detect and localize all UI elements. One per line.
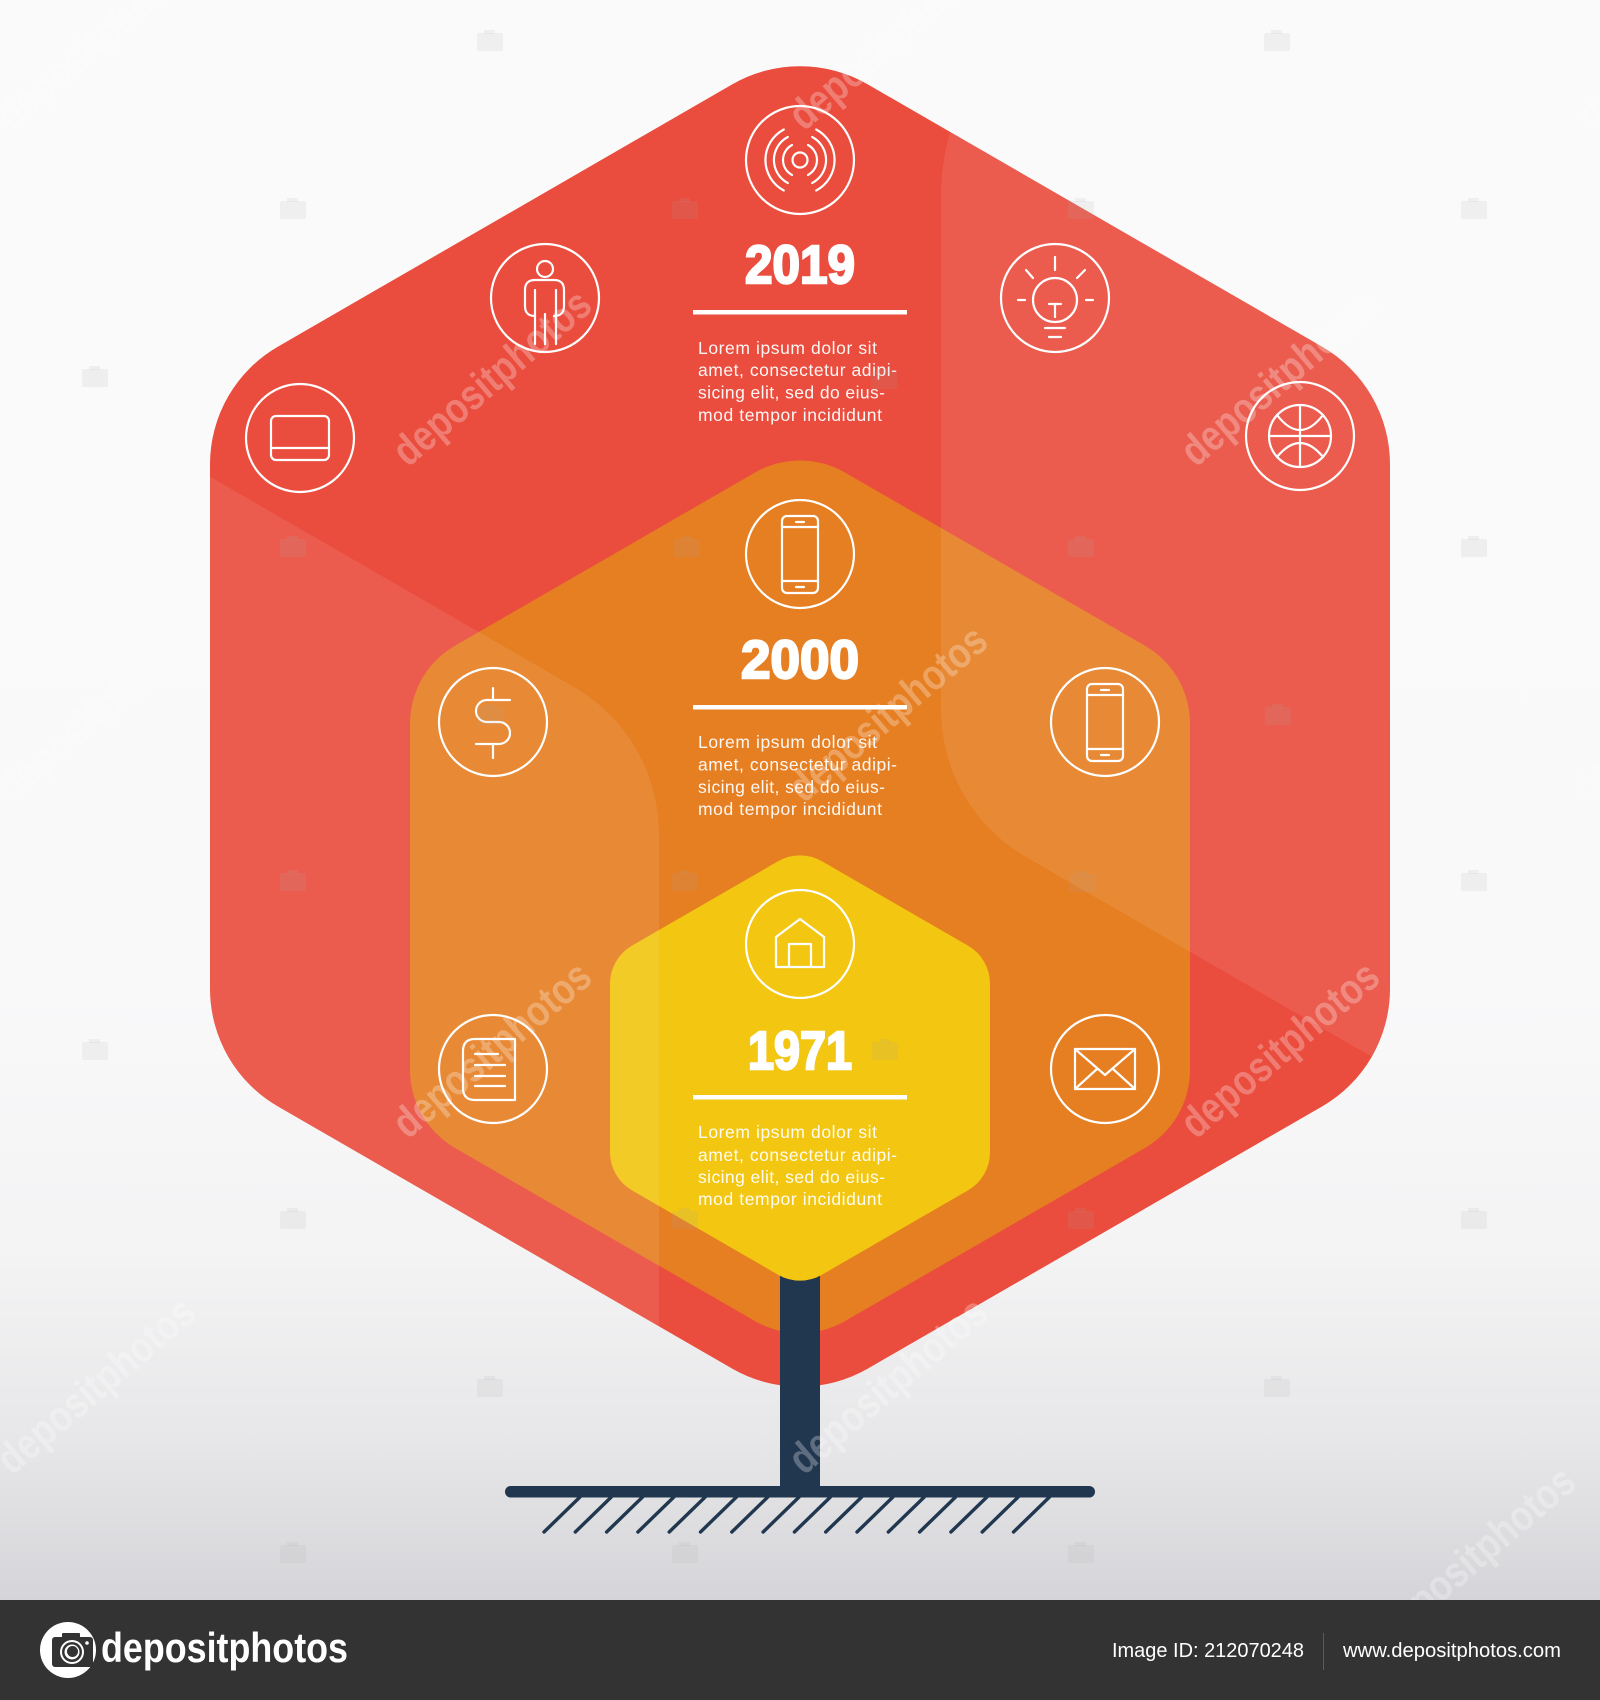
text block 2000: sicing elit, sed do eius-	[698, 777, 885, 797]
icon: basketball	[1246, 382, 1354, 490]
panel: middle hexagon 2000	[410, 460, 1190, 1333]
icon: house	[746, 890, 854, 998]
text block 1971: sicing elit, sed do eius-	[698, 1167, 885, 1187]
divider 1971	[693, 1095, 907, 1100]
icon: envelope	[1051, 1015, 1159, 1123]
panel: outer hexagon 2019	[210, 66, 1390, 1387]
year 2000: 2000	[741, 630, 859, 690]
ground line	[505, 1486, 1095, 1498]
year 1971: 1971	[748, 1021, 852, 1081]
watermark text: depositphotos	[779, 1288, 997, 1484]
watermark camera marks	[82, 30, 1487, 1563]
divider 2019	[693, 310, 907, 314]
text block 2019: sicing elit, sed do eius-	[698, 382, 885, 402]
year 2019: 2019	[745, 235, 855, 295]
panel: inner hexagon 1971	[610, 855, 990, 1281]
icon: dollar	[439, 668, 547, 776]
text block 2019: mod tempor incididunt	[698, 405, 882, 425]
text block 2000: Lorem ipsum dolor sit	[698, 732, 877, 752]
text block 1971: mod tempor incididunt	[698, 1189, 882, 1209]
text block 2000: amet, consectetur adipi-	[698, 754, 897, 774]
footer divider	[1323, 1633, 1324, 1670]
footer logo: depositphotos	[101, 1624, 348, 1671]
watermark text: depositphotos	[1171, 280, 1389, 476]
divider 2000	[693, 705, 907, 710]
watermark text: depositphotos	[383, 952, 601, 1148]
footer bar	[0, 1600, 1600, 1700]
footer url: www.depositphotos.com	[1342, 1640, 1561, 1662]
ground hatching	[544, 1497, 1050, 1532]
icon: smartphone 2000	[746, 500, 854, 608]
watermark text: depositphotos	[383, 280, 601, 476]
text block 2019: amet, consectetur adipi-	[698, 360, 897, 380]
text block 1971: Lorem ipsum dolor sit	[698, 1122, 877, 1142]
left translucent cube face	[210, 477, 659, 1326]
icon: signal waves	[746, 106, 854, 214]
icon: person	[491, 244, 599, 352]
footer logo	[40, 1622, 348, 1678]
text block 2019: Lorem ipsum dolor sit	[698, 338, 877, 358]
tree trunk	[780, 1250, 820, 1490]
icon: smartphone right	[1051, 668, 1159, 776]
text block 1971: amet, consectetur adipi-	[698, 1145, 897, 1165]
right translucent cube face	[941, 132, 1390, 1056]
icon: card	[246, 384, 354, 492]
text block 2000: mod tempor incididunt	[698, 799, 882, 819]
icon: light bulb	[1001, 244, 1109, 352]
watermark text: depositphotos	[779, 616, 997, 812]
icon: document	[439, 1015, 547, 1123]
watermark text	[397, 73, 1556, 1600]
footer image id: Image ID: 212070248	[1112, 1640, 1304, 1662]
watermark text: depositphotos	[1171, 952, 1389, 1148]
